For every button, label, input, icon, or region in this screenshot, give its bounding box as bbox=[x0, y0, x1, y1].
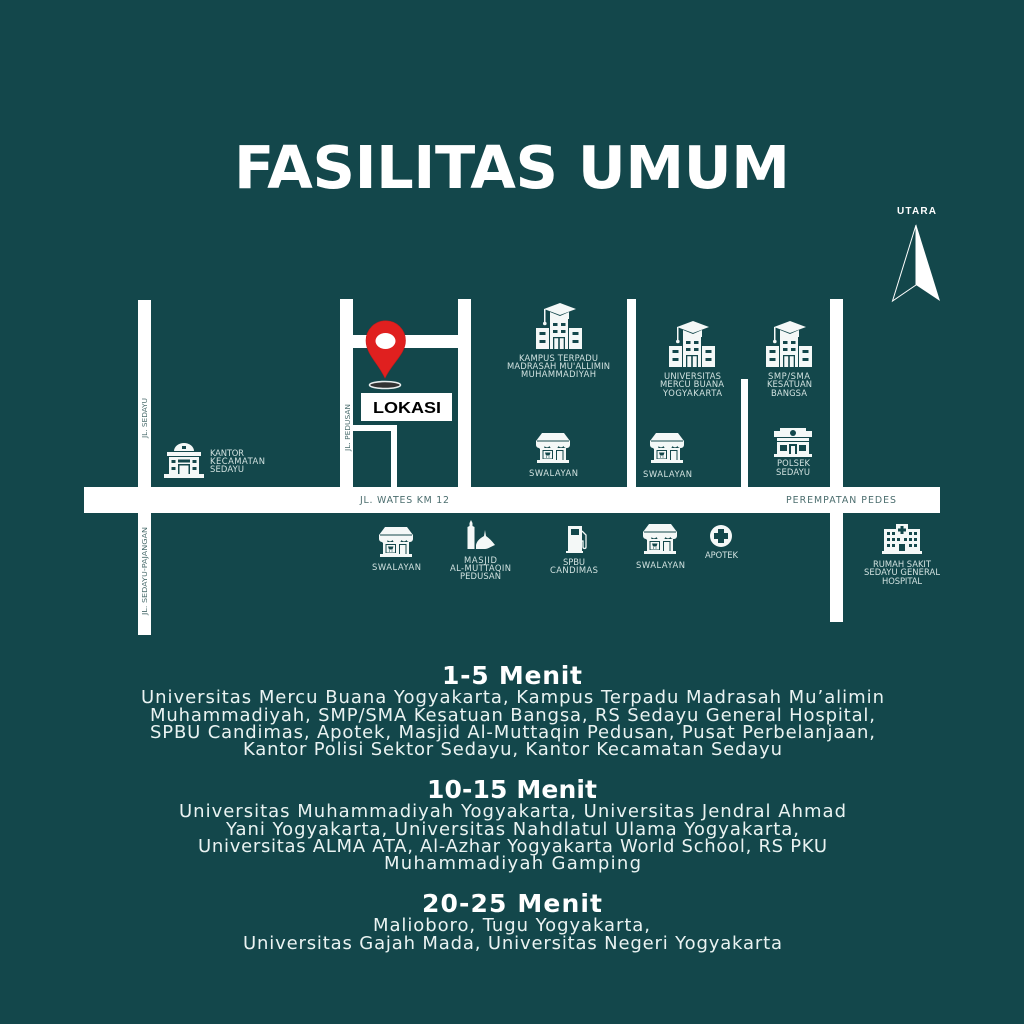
place: kampus terpadu: MUHAMMADIYAH bbox=[521, 369, 596, 379]
place: masjid al-muttaqin bbox=[450, 520, 511, 581]
text block: 1-5 menit bbox=[141, 661, 884, 760]
location pin bbox=[366, 321, 406, 388]
place: rumah sakit: HOSPITAL bbox=[882, 576, 922, 586]
road labels: JL. SEDAYU bbox=[141, 398, 149, 439]
text block: 1-5 menit: Kantor Polisi Sektor Sedayu, Kantor Kecamatan Sedayu bbox=[243, 739, 782, 760]
road labels: JL. WATES KM 12 bbox=[359, 495, 449, 506]
road map bbox=[84, 299, 940, 635]
place: spbu candimas: SPBU bbox=[563, 557, 585, 567]
text block: 20-25 menit: 20-25 Menit bbox=[422, 889, 602, 918]
text block: 1-5 menit: 1-5 Menit bbox=[442, 661, 582, 690]
text block: 20-25 menit bbox=[243, 889, 782, 954]
place: universitas mercu buana: YOGYAKARTA bbox=[662, 388, 722, 398]
text block: 10-15 menit: Muhammadiyah Gamping bbox=[384, 853, 641, 874]
place: kantor kecamatan: KECAMATAN bbox=[210, 456, 265, 466]
place: masjid al-muttaqin: MASJID bbox=[464, 555, 497, 565]
north arrow: UTARA bbox=[897, 206, 936, 217]
title: FASILITAS UMUM bbox=[234, 133, 790, 202]
place: polsek sedayu: SEDAYU bbox=[776, 467, 810, 477]
place: polsek sedayu bbox=[774, 428, 812, 477]
place: swalayan 2: SWALAYAN bbox=[643, 469, 692, 479]
road labels bbox=[141, 398, 896, 616]
text block: 1-5 menit: Universitas Mercu Buana Yogyakarta, Kampus Terpadu Madrasah Mu’alimin bbox=[141, 687, 884, 708]
place: universitas mercu buana: MERCU BUANA bbox=[660, 379, 724, 389]
location label: LOKASI bbox=[373, 400, 441, 417]
place: smp/sma kesatuan bangsa: KESATUAN bbox=[767, 379, 812, 389]
place: apotek: APOTEK bbox=[705, 550, 738, 560]
text block: 10-15 menit: 10-15 Menit bbox=[427, 775, 597, 804]
text block: 10-15 menit bbox=[179, 775, 846, 874]
place: polsek sedayu: POLSEK bbox=[777, 458, 810, 468]
place: rumah sakit: SEDAYU GENERAL bbox=[864, 567, 940, 577]
location label bbox=[361, 393, 452, 421]
place: kantor kecamatan: SEDAYU bbox=[210, 464, 244, 474]
place: swalayan 1 bbox=[529, 433, 578, 478]
text block: 10-15 menit: Universitas Muhammadiyah Yogyakarta, Universitas Jendral Ahmad bbox=[179, 801, 846, 822]
place: masjid al-muttaqin: AL-MUTTAQIN bbox=[450, 563, 511, 573]
place: spbu candimas: CANDIMAS bbox=[550, 565, 598, 575]
road labels: JL. PEDUSAN bbox=[344, 404, 352, 452]
place: universitas mercu buana bbox=[660, 321, 724, 398]
place: swalayan 4: SWALAYAN bbox=[636, 560, 685, 570]
place: kantor kecamatan: KANTOR bbox=[210, 448, 244, 458]
place: kampus terpadu: KAMPUS TERPADU bbox=[519, 353, 598, 363]
place: apotek bbox=[705, 525, 738, 560]
place: smp/sma kesatuan bangsa bbox=[766, 321, 812, 398]
place: swalayan 4 bbox=[636, 524, 685, 570]
place: swalayan 3: SWALAYAN bbox=[372, 562, 421, 572]
text block: 20-25 menit: Malioboro, Tugu Yogyakarta, bbox=[373, 915, 650, 936]
place: kampus terpadu bbox=[507, 303, 610, 379]
place: masjid al-muttaqin: PEDUSAN bbox=[460, 571, 501, 581]
place: swalayan 2 bbox=[643, 433, 692, 479]
text block: 1-5 menit: Muhammadiyah, SMP/SMA Kesatuan Bangsa, RS Sedayu General Hospital, bbox=[150, 705, 875, 726]
text block: 10-15 menit: Yani Yogyakarta, Universitas Nahdlatul Ulama Yogyakarta, bbox=[225, 819, 799, 840]
road labels: PEREMPATAN PEDES bbox=[786, 495, 896, 506]
place: swalayan 1: SWALAYAN bbox=[529, 468, 578, 478]
place: kantor kecamatan bbox=[164, 443, 265, 478]
place: kampus terpadu: MADRASAH MU'ALLIMIN bbox=[507, 361, 610, 371]
place: rumah sakit: RUMAH SAKIT bbox=[873, 559, 932, 569]
north arrow bbox=[892, 206, 940, 301]
place: swalayan 3 bbox=[372, 527, 421, 572]
place: spbu candimas bbox=[550, 526, 598, 575]
text block: 10-15 menit: Universitas ALMA ATA, Al-Azhar Yogyakarta World School, RS PKU bbox=[198, 836, 827, 857]
place: rumah sakit bbox=[864, 524, 940, 586]
place: universitas mercu buana: UNIVERSITAS bbox=[664, 371, 721, 381]
place: smp/sma kesatuan bangsa: SMP/SMA bbox=[768, 371, 810, 381]
text block: 1-5 menit: SPBU Candimas, Apotek, Masjid Al-Muttaqin Pedusan, Pusat Perbelanjaan, bbox=[150, 722, 875, 743]
place: smp/sma kesatuan bangsa: BANGSA bbox=[771, 388, 807, 398]
text block: 20-25 menit: Universitas Gajah Mada, Universitas Negeri Yogyakarta bbox=[243, 933, 782, 954]
road labels: JL. SEDAYU-PAJANGAN bbox=[141, 527, 149, 616]
